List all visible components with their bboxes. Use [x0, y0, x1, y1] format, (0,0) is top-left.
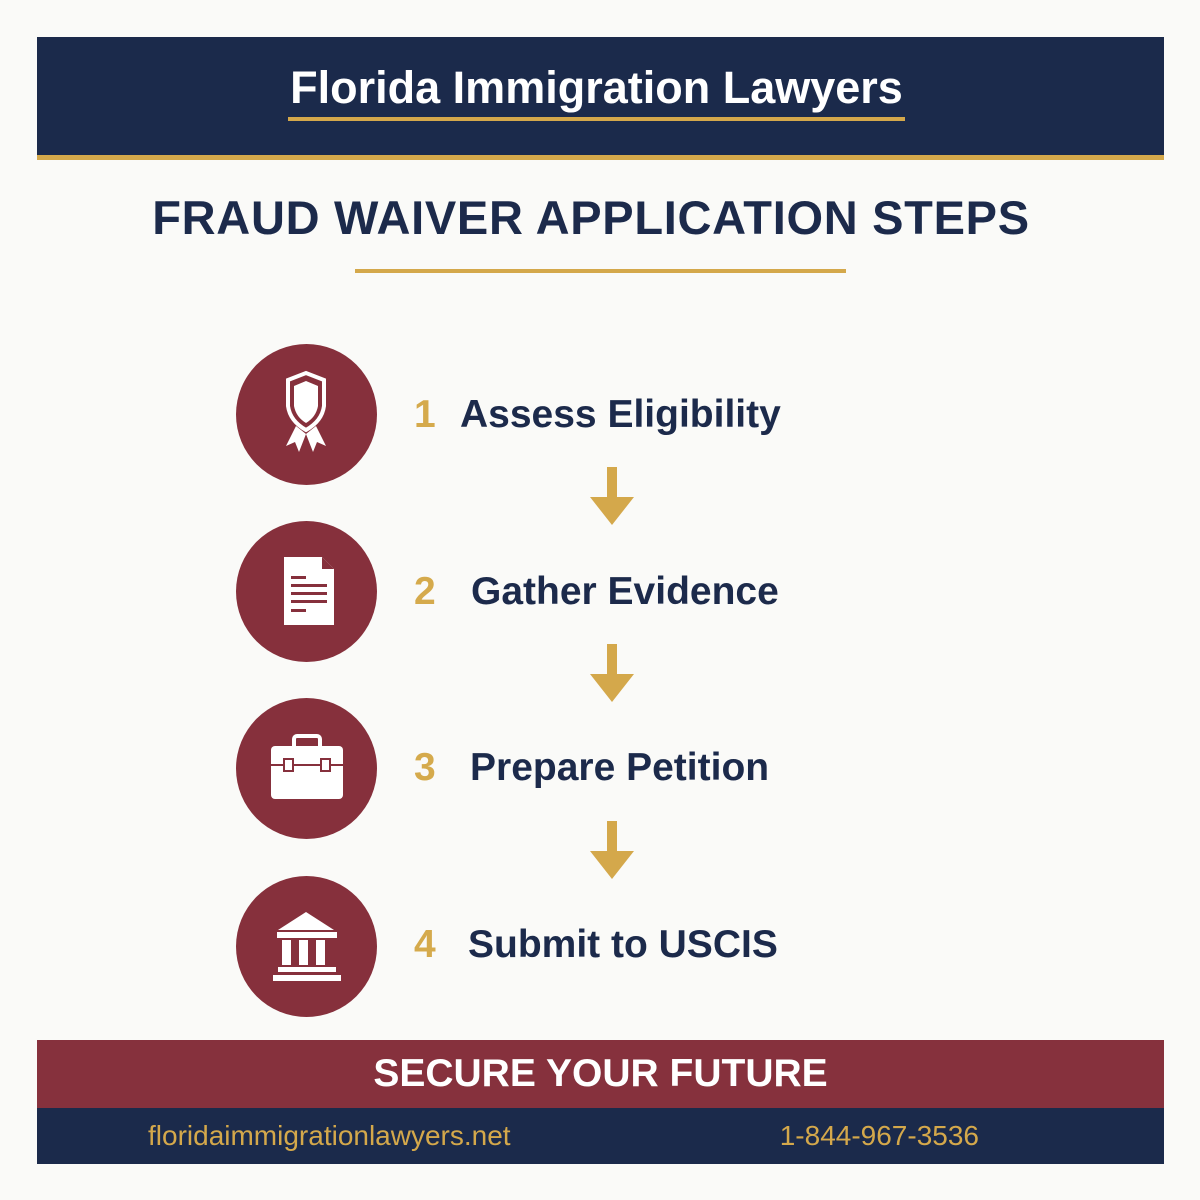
arrow 3	[590, 821, 634, 879]
website: floridaimmigrationlawyers.net	[148, 1120, 511, 1151]
step 3 icon: briefcase	[236, 698, 377, 839]
step 2 icon: document	[236, 521, 377, 662]
phone: 1-844-967-3536	[780, 1120, 979, 1151]
tagline banner: SECURE YOUR FUTURE	[373, 1052, 828, 1095]
step 1 label: Assess Eligibility	[460, 393, 781, 436]
footer contact bar	[37, 1108, 1164, 1164]
step 1 icon: award badge	[236, 344, 377, 485]
tagline banner	[37, 1040, 1164, 1108]
arrow 1	[590, 467, 634, 525]
step 2 label: 2	[414, 570, 436, 613]
step 3 label: Prepare Petition	[470, 746, 769, 789]
step 4 icon: government building	[236, 876, 377, 1017]
header banner	[37, 37, 1164, 160]
arrow 2	[590, 644, 634, 702]
header title: Florida Immigration Lawyers	[290, 62, 903, 113]
step 4 label: 4	[414, 923, 436, 966]
heading underline	[355, 269, 846, 273]
step 2 label: Gather Evidence	[471, 570, 779, 613]
main heading: FRAUD WAIVER APPLICATION STEPS	[152, 191, 1030, 244]
step 3 label: 3	[414, 746, 436, 789]
step 1 label: 1	[414, 393, 436, 436]
step 4 label: Submit to USCIS	[468, 923, 778, 966]
